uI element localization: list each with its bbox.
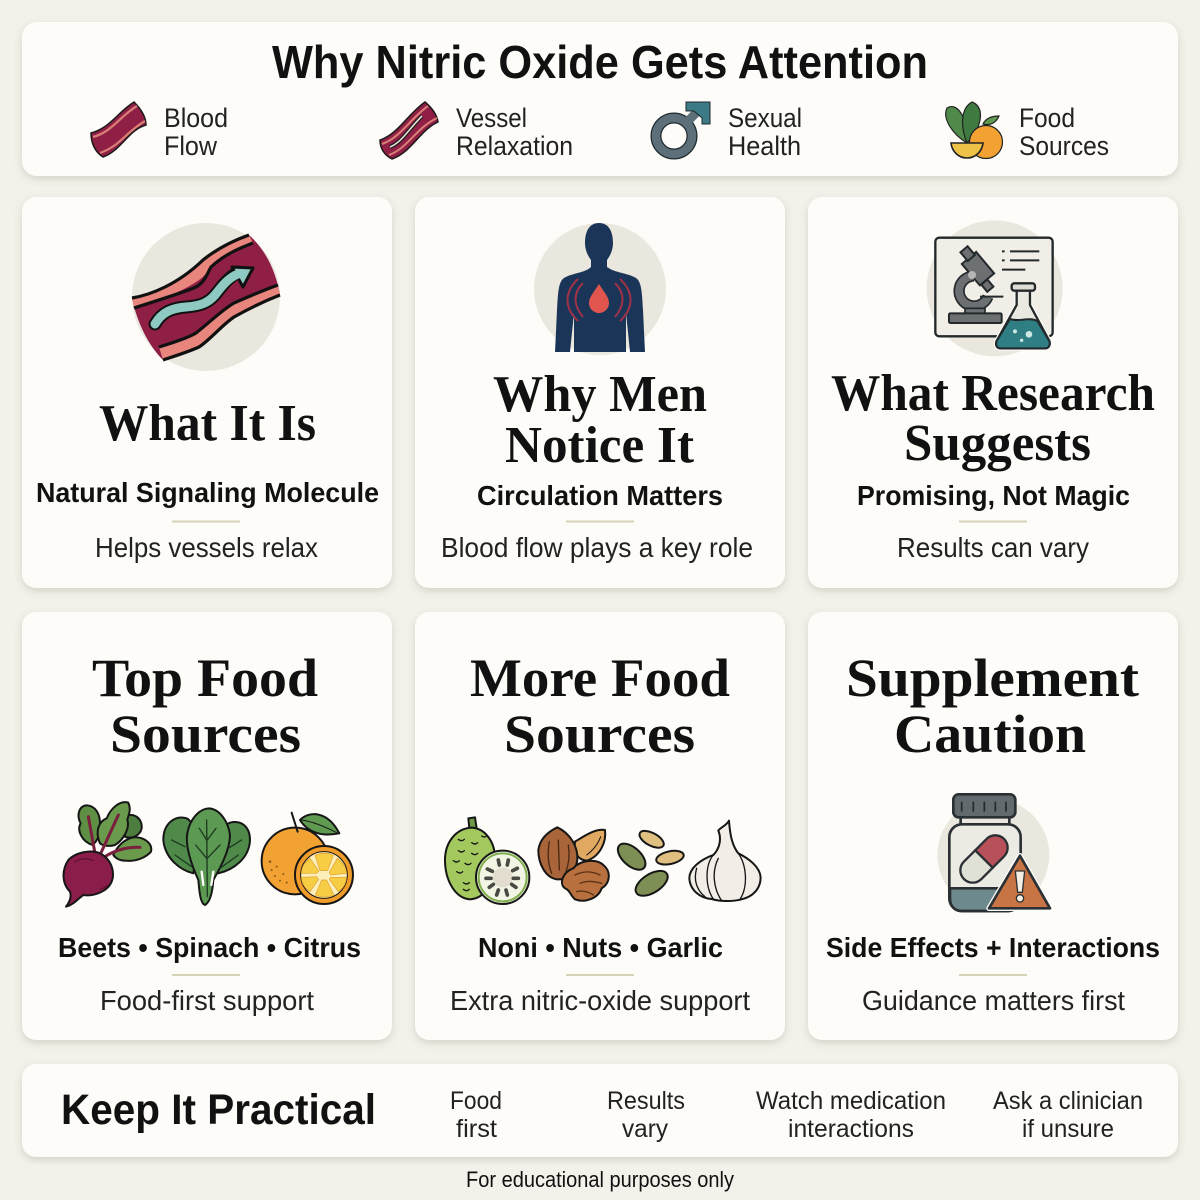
panel: what research suggests xyxy=(808,197,1178,588)
heading xyxy=(846,648,1139,764)
tip: results vary: vary xyxy=(622,1115,668,1143)
label: health: Health xyxy=(728,131,801,161)
icon: food sources xyxy=(946,102,1002,158)
heading: What Research xyxy=(831,365,1155,422)
icon: vessel relaxation xyxy=(380,102,438,159)
icon: garlic xyxy=(689,821,761,901)
icon: nuts xyxy=(538,827,609,901)
heading: Caution xyxy=(894,704,1086,764)
heading: Why Men xyxy=(493,366,707,423)
heading: Supplement xyxy=(846,648,1139,708)
icon: supplement bottle with warning xyxy=(937,794,1050,911)
tip: food first: first xyxy=(456,1115,497,1143)
icons: noni, nuts, seeds, garlic xyxy=(445,817,761,904)
panel: more food sources xyxy=(415,612,785,1040)
tip: ask a clinician: if unsure xyxy=(1022,1115,1114,1143)
tip: ask a clinician: Ask a clinician xyxy=(993,1087,1143,1115)
tip: results vary: Results xyxy=(607,1087,685,1115)
tip: food first xyxy=(450,1087,502,1143)
tip: watch medication interactions: interactions xyxy=(788,1115,914,1143)
label: flow: Flow xyxy=(164,131,217,161)
subheading: Beets • Spinach • Citrus xyxy=(58,932,361,963)
heading xyxy=(92,648,318,764)
icon: microscope and flask xyxy=(927,220,1063,356)
panel: header xyxy=(22,22,1178,176)
panel: keep it practical xyxy=(22,1064,1178,1157)
label: blood: Blood xyxy=(164,103,228,133)
heading xyxy=(831,365,1155,472)
tip: ask a clinician xyxy=(993,1087,1143,1143)
description: Guidance matters first xyxy=(862,985,1125,1016)
icon: orange xyxy=(262,813,353,904)
footer note: For educational purposes only xyxy=(466,1167,734,1192)
description: Extra nitric-oxide support xyxy=(450,985,750,1016)
tip: results vary xyxy=(607,1087,685,1143)
label: sexual: Sexual xyxy=(728,103,802,133)
heading xyxy=(493,366,707,474)
heading: Sources xyxy=(504,704,695,764)
heading: More Food xyxy=(470,648,730,708)
heading: Notice It xyxy=(505,417,695,474)
heading: What It Is xyxy=(99,395,316,452)
heading: Suggests xyxy=(904,415,1091,472)
title: Why Nitric Oxide Gets Attention xyxy=(272,36,928,88)
heading: Sources xyxy=(110,704,301,764)
icon: male symbol xyxy=(656,102,710,154)
label: food: Food xyxy=(1019,103,1075,133)
description: Blood flow plays a key role xyxy=(441,532,753,563)
subheading: Noni • Nuts • Garlic xyxy=(478,932,723,963)
subheading: Promising, Not Magic xyxy=(857,480,1130,511)
icon: noni fruit xyxy=(445,817,529,904)
panel: what it is xyxy=(22,197,392,588)
label: vessel: Vessel xyxy=(456,103,527,133)
subheading: Circulation Matters xyxy=(477,480,723,511)
description: Helps vessels relax xyxy=(95,532,318,563)
icons: beet, spinach, citrus xyxy=(64,802,353,907)
heading xyxy=(470,648,730,764)
panel: supplement caution xyxy=(808,612,1178,1040)
icon: body silhouette xyxy=(534,223,666,355)
label: relaxation: Relaxation xyxy=(456,131,573,161)
tip: watch medication interactions xyxy=(756,1087,946,1143)
heading: Keep It Practical xyxy=(61,1086,376,1134)
icon: blood flow xyxy=(91,102,146,157)
subheading: Side Effects + Interactions xyxy=(826,932,1160,963)
panel: top food sources xyxy=(22,612,392,1040)
subheading: Natural Signaling Molecule xyxy=(36,477,379,508)
icon: spinach xyxy=(163,808,250,905)
panel: why men notice it xyxy=(415,197,785,588)
icon: beet xyxy=(64,802,151,907)
label: sources: Sources xyxy=(1019,131,1109,161)
icon: seeds xyxy=(613,827,685,901)
heading: Top Food xyxy=(92,648,318,708)
icon: artery with arrow xyxy=(132,223,280,371)
description: Food-first support xyxy=(100,985,314,1016)
tip: food first: Food xyxy=(450,1087,502,1115)
description: Results can vary xyxy=(897,532,1089,563)
tip: watch medication interactions: Watch medication xyxy=(756,1087,946,1115)
